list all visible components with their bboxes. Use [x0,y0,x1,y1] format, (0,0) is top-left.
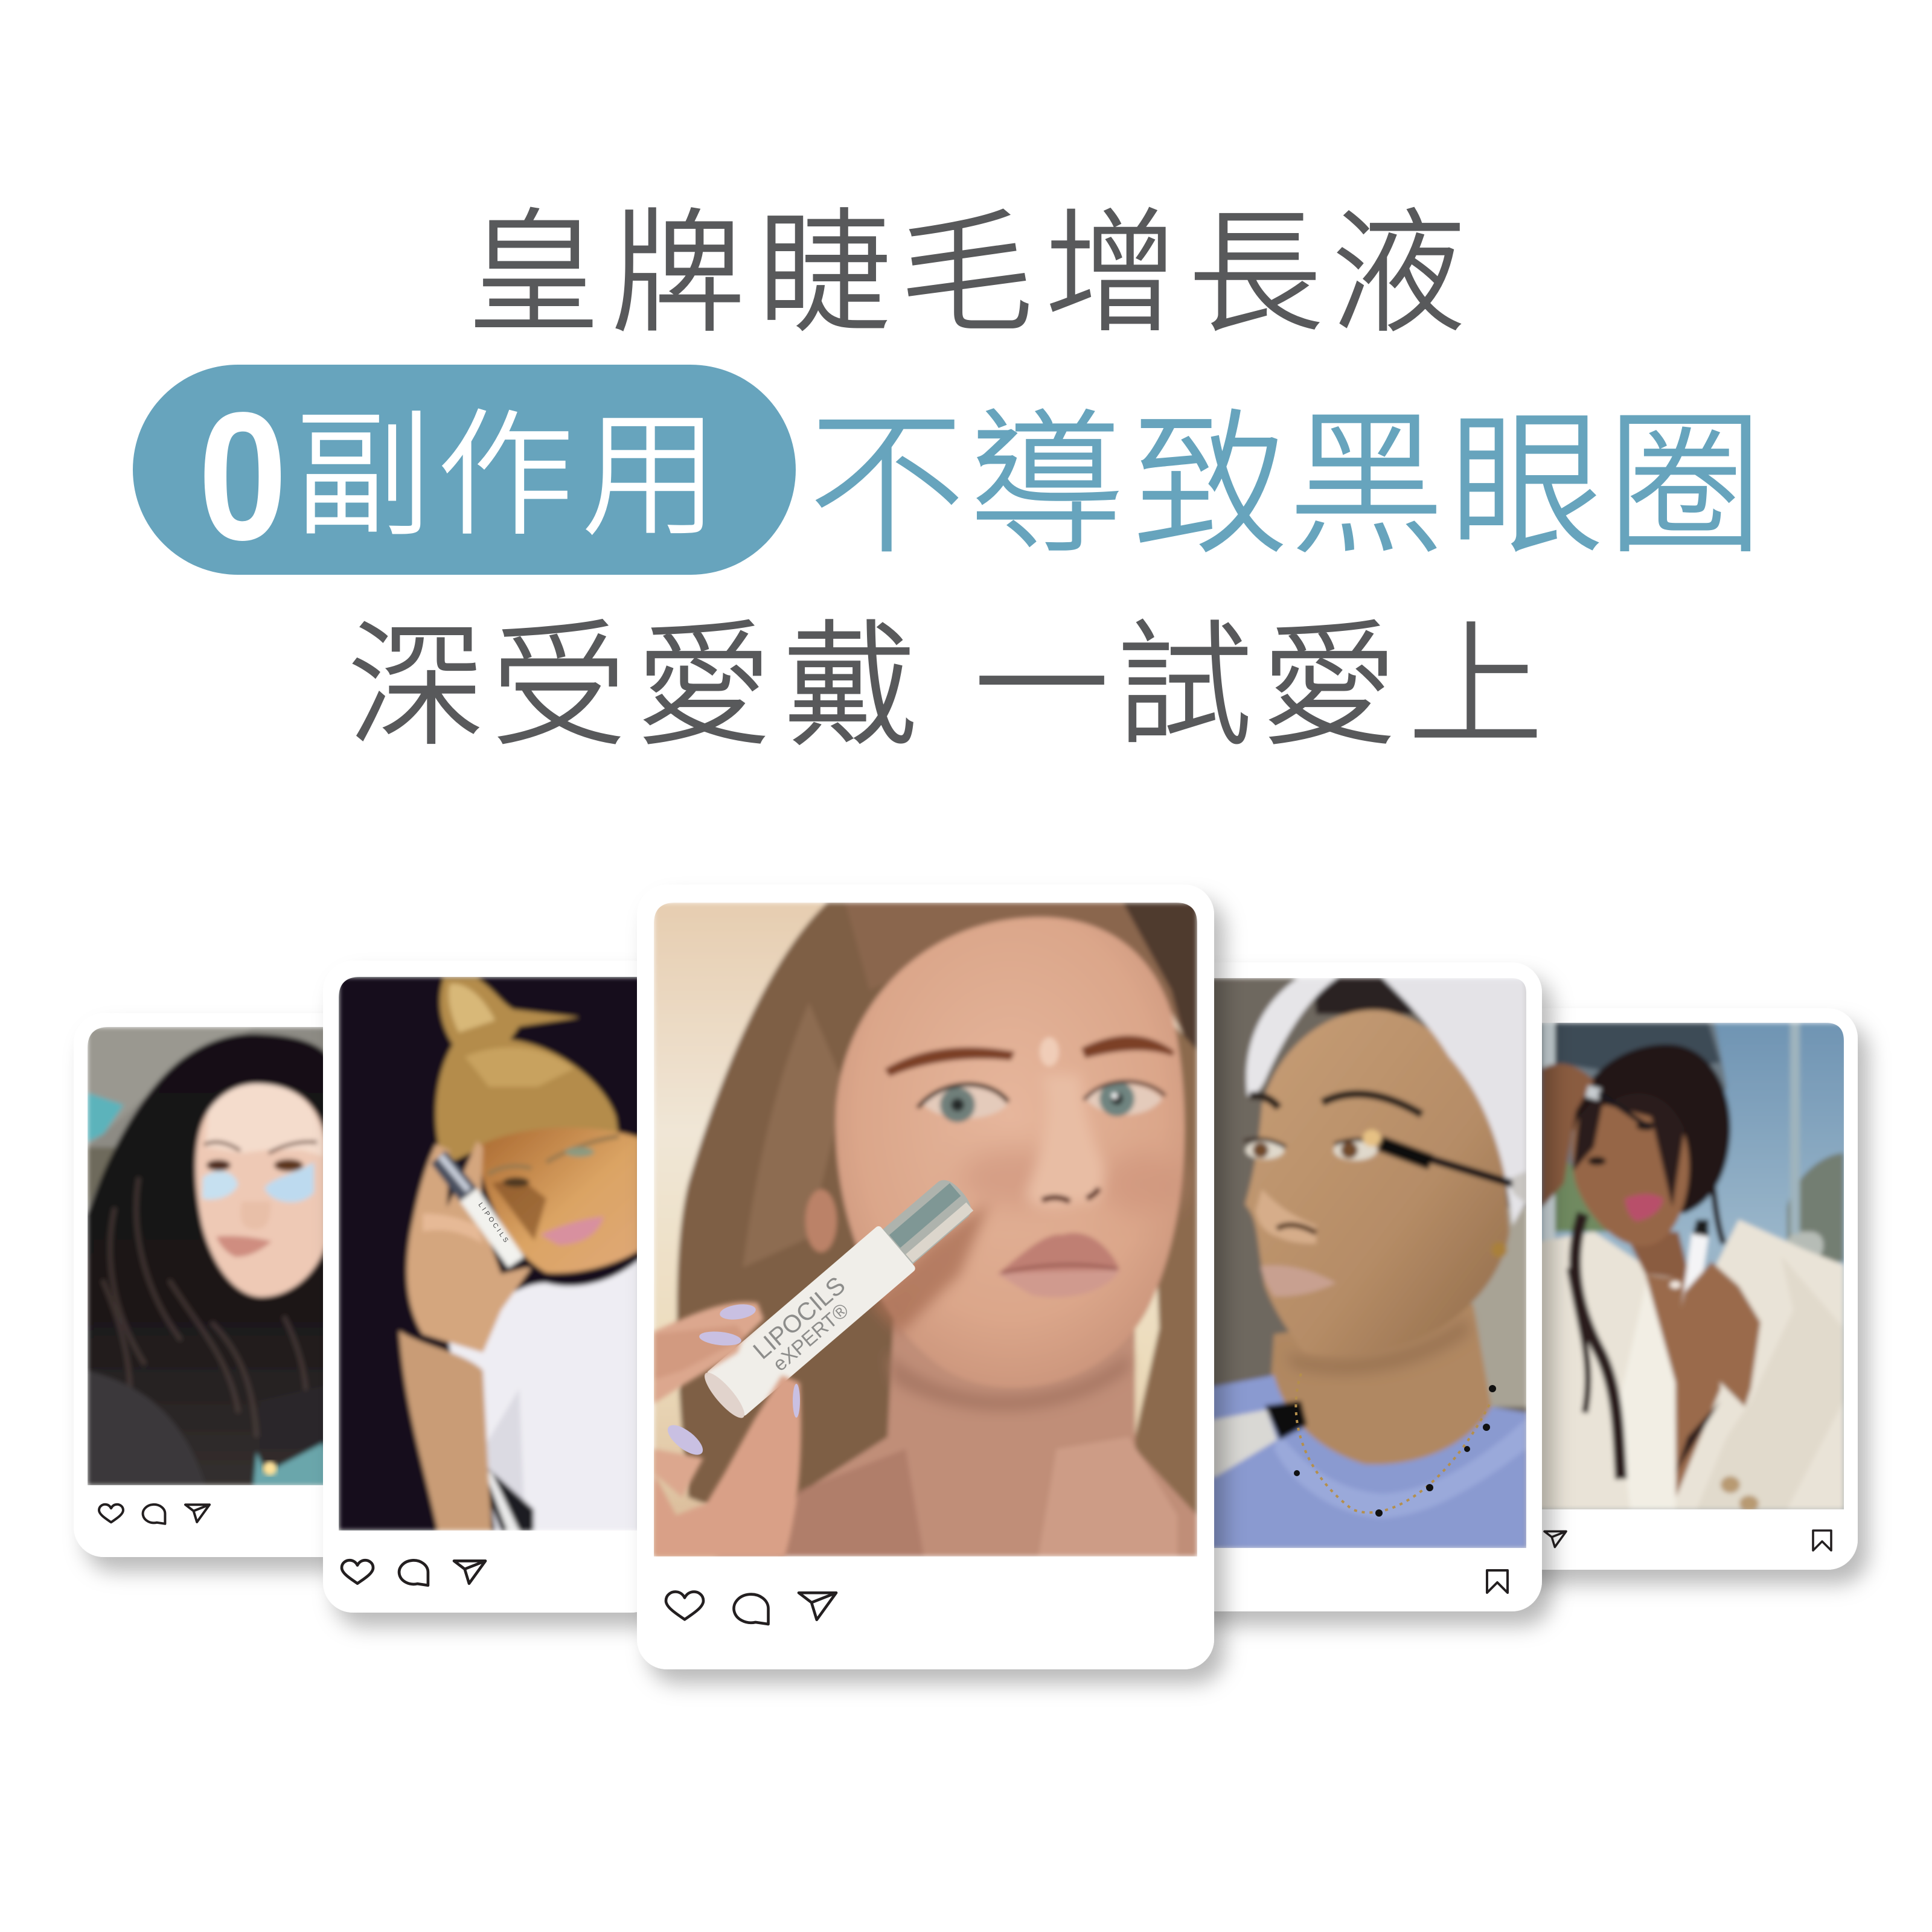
hair back [1571,1044,1730,1214]
face [836,917,1185,1387]
hair [436,978,622,1165]
hair strands [1575,1214,1621,1479]
lips [997,1233,1120,1275]
badge text: 副作用 [295,399,718,552]
LIPOCILS tube [699,1169,981,1423]
hair [677,903,942,1556]
necklace [1296,1374,1491,1512]
nails [663,1302,800,1460]
photo: blonde woman with serum tube [339,977,665,1531]
icon: bookmark [1487,1570,1508,1593]
left hand [1542,1064,1594,1208]
jacket [88,1371,205,1485]
eye patches [202,1171,238,1200]
photo: woman with towel applying mascara [1201,978,1527,1549]
earring [1491,1242,1507,1258]
chest [1645,1268,1721,1497]
tube [431,1151,477,1201]
hand [654,1302,801,1556]
serum tube [1201,1410,1277,1479]
buttons [1721,1476,1740,1493]
LIPOCILS tube: LIPOCILS [748,1271,851,1364]
icons: like comment share [342,1560,485,1585]
face [196,1084,326,1297]
nostril and lips [1277,1225,1316,1233]
shirt [447,1259,640,1531]
icons: share and bookmark [1544,1531,1831,1550]
photo: woman in linen blazer [1527,1023,1847,1512]
concealer tip, brush and wand [1363,1130,1381,1147]
face [477,1128,640,1273]
photo: woman with eye patches [88,1027,341,1486]
butterfly [250,1440,323,1485]
brows [1250,1094,1422,1115]
freckle blush [960,1147,1069,1208]
photo: blonde woman with serum tube: LIPOCILS [477,1201,511,1246]
hand with tube [1678,1262,1761,1407]
eyes [924,1087,1007,1118]
badge digit: 0 [198,374,287,578]
towel [1246,978,1337,1096]
nose [1026,1075,1104,1207]
card 5: far right post [1485,1008,1858,1570]
ear [805,1189,837,1252]
icons: like comment share [666,1591,836,1624]
card 2: left post [323,961,665,1613]
tube [1681,1233,1709,1316]
tube shadow on cheek [869,1201,990,1334]
photo: freckled woman holding LIPOCILS tube [654,903,1197,1556]
lips [216,1236,272,1257]
heading: line 3: 深受愛戴一試愛上 [348,611,1543,762]
neck [1624,1232,1690,1280]
sparkle [263,1461,277,1476]
heading: no dark circles: 不導致黑眼圈 [809,398,1763,572]
badge: 0 side effects [133,365,796,578]
eyes [1246,1141,1284,1159]
hair sheen [103,1177,307,1437]
brows and eyes [204,1142,317,1153]
arm and hand [399,1331,491,1531]
face [1245,1010,1509,1355]
heading: line 1: 皇牌睫毛增長液 [467,199,1465,349]
card 3: centre post [637,884,1214,1669]
sweater [1201,1375,1526,1548]
neck [1271,1304,1491,1465]
neck and chest [712,1316,1197,1556]
brows [888,1050,1011,1073]
hair mass [88,1034,338,1485]
hair [1313,978,1413,1014]
face [1572,1104,1689,1246]
card 4: right post [1183,962,1542,1611]
card 1: far left post [73,1027,323,1583]
blazer [1527,1220,1844,1509]
LIPOCILS tube: eXPERT® [769,1299,852,1375]
icons: like comment share [99,1505,210,1524]
